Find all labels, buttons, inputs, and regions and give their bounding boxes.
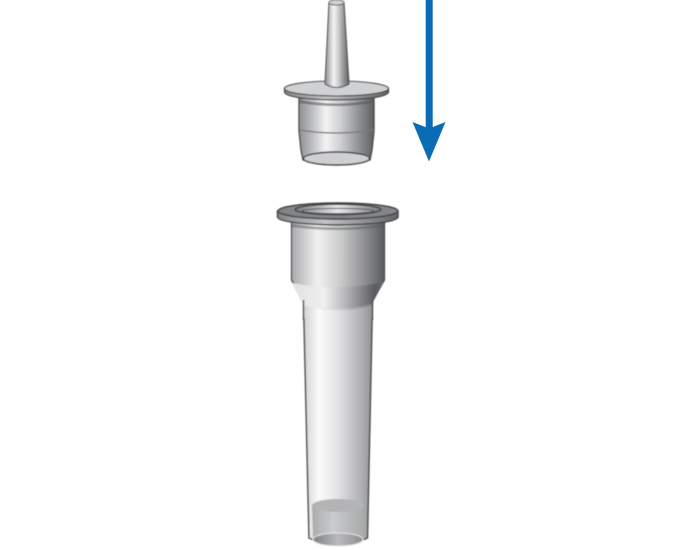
tube upper body xyxy=(292,222,384,321)
nozzle flange xyxy=(284,81,388,100)
liquid xyxy=(312,499,364,546)
icon: collection tube xyxy=(278,203,398,546)
icon: nozzle cap xyxy=(284,0,388,165)
tube flange xyxy=(278,203,398,225)
tube lower shaft xyxy=(304,300,372,545)
nozzle spout xyxy=(325,0,349,87)
arrow: downward insertion direction xyxy=(412,0,446,162)
nozzle lower body xyxy=(299,98,374,165)
